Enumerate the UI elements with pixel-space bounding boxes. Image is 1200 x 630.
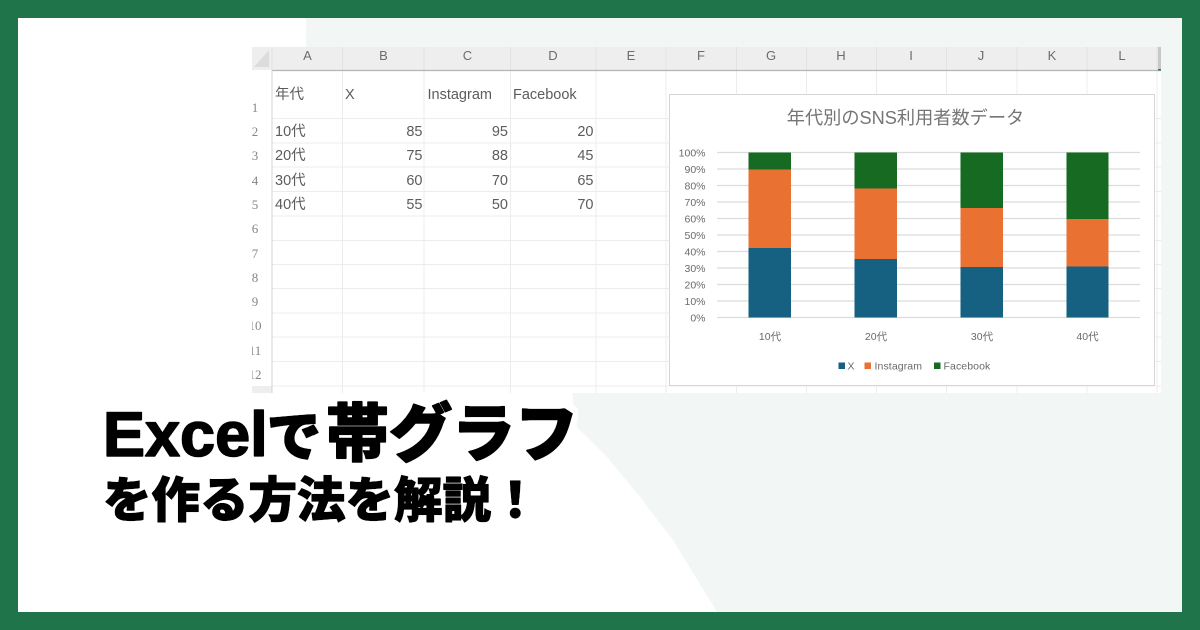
column letters: L [1118,48,1126,63]
title line 2: を作る方法を解説！ [103,474,540,528]
y axis labels: 70% [684,197,706,209]
table data: 40代 [275,196,306,213]
y axis labels [679,148,706,324]
row numbers: 6 [252,221,259,236]
y axis labels: 10% [684,296,706,308]
bar: 10代 [748,152,791,318]
table data: 70 [492,173,508,189]
chart title: 年代別のSNS利用者数データ [787,108,1024,128]
column letters: B [379,48,388,63]
title line 1: で [267,408,321,468]
column letters [303,51,1126,60]
table data: 10代 [275,123,306,140]
table data: 年代 [275,86,304,103]
table data [275,86,594,213]
table data: Instagram [428,87,492,103]
row numbers: 4 [252,173,259,188]
y axis labels: 30% [684,263,706,275]
row numbers: 3 [252,148,258,163]
title line 1: Excel [103,400,268,470]
y axis labels: 20% [684,280,706,292]
x axis labels: 10代 [759,331,782,343]
table data: 30代 [275,172,306,189]
row numbers: 1 [252,100,258,115]
x axis labels: 20代 [865,331,888,343]
select-all corner [254,50,269,67]
row 13 header stub [252,386,272,393]
chart frame [670,94,1154,386]
x axis labels [760,331,1098,342]
column letters: G [766,48,776,63]
x axis labels: 30代 [971,331,994,343]
bar: 40代 [1066,152,1108,318]
row numbers: 2 [252,124,258,139]
row numbers: 8 [252,270,258,285]
sheet background [306,71,1161,393]
column letters: I [909,48,913,63]
y axis labels: 90% [684,164,706,176]
column letters: A [303,48,312,63]
gridlines [717,152,1140,318]
legend: Facebook [944,360,991,372]
table data: 45 [577,148,594,164]
row numbers: 10 [248,318,262,333]
stacked bar chart [670,94,1154,386]
table data: 95 [492,124,508,140]
y axis labels: 50% [684,230,706,242]
column letters: C [463,48,472,63]
column header bar [252,47,1161,70]
column letters: D [548,48,558,63]
table data: 70 [577,197,594,213]
bar: 30代 [960,152,1003,318]
column letters: E [627,48,636,63]
legend: X [848,360,855,372]
y axis labels: 40% [684,246,706,258]
bar: 20代 [854,152,897,318]
column letters: H [836,48,846,63]
table data: 55 [406,197,422,213]
y axis labels: 0% [690,312,706,324]
title [103,400,578,528]
spreadsheet [248,47,1161,393]
y axis labels: 80% [684,180,706,192]
x axis labels: 40代 [1076,331,1099,343]
title line 1: 帯グラフ [326,400,578,470]
column letters: J [978,48,984,63]
y axis labels: 100% [679,148,706,160]
table data: 20代 [275,147,306,164]
table data: 60 [406,173,422,189]
table data: 85 [406,124,422,140]
row numbers: 9 [252,294,258,309]
table data: X [345,87,355,103]
row numbers: 5 [252,197,258,212]
pale background shape [306,18,1182,612]
table data: 50 [492,197,508,213]
legend [838,362,990,372]
table data: 75 [406,148,422,164]
row numbers: 11 [249,343,261,358]
table data: 20 [577,124,594,140]
legend: Instagram [874,360,922,372]
column letters: K [1048,48,1057,63]
row numbers: 7 [252,246,259,261]
table data: 65 [577,173,594,189]
row numbers [252,104,261,379]
column letters: F [697,48,705,63]
table data: 88 [492,148,508,164]
table data: Facebook [513,87,577,103]
y axis labels: 60% [684,214,706,226]
row numbers: 12 [248,367,262,382]
